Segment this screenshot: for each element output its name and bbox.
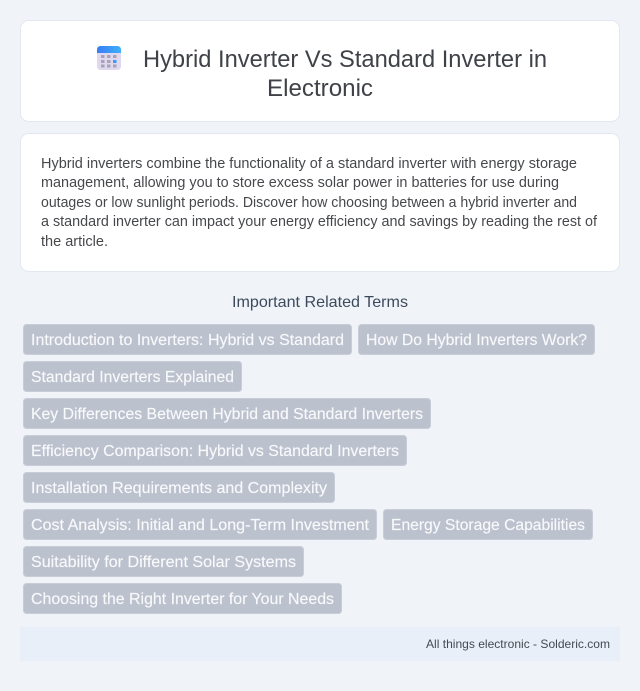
intro paragraph: Hybrid inverters combine the functionality of a standard inverter with energy storage (41, 156, 577, 172)
tag: introduction: Introduction to Inverters: Hybrid vs Standard (31, 332, 344, 349)
tag: choosing: Choosing the Right Inverter for Your Needs (31, 591, 334, 608)
tag: choosing (24, 584, 342, 614)
panel: introduction text (20, 134, 620, 272)
title: Hybrid Inverter Vs Standard Inverter in (143, 46, 547, 73)
footer (20, 627, 620, 661)
tag: how hybrid inverters work: How Do Hybrid Inverters Work? (366, 332, 587, 349)
tag: installation: Installation Requirements and Complexity (31, 480, 327, 497)
footer: All things electronic - Solderic.com (426, 637, 610, 651)
tag: key differences: Key Differences Between Hybrid and Standard Inverters (31, 406, 423, 423)
heading: important related terms: Important Related Terms (232, 294, 408, 311)
tag: how hybrid inverters work (358, 324, 594, 354)
icon: calendar (97, 46, 121, 70)
tag: suitability: Suitability for Different Solar Systems (31, 554, 296, 571)
title (143, 46, 547, 102)
tag: standard inverters (24, 362, 242, 392)
intro paragraph: outages or low sunlight periods. Discover how choosing between a hybrid inverter and (41, 195, 577, 211)
tags: related terms (24, 324, 594, 614)
tag: introduction (24, 324, 352, 354)
tag: efficiency: Efficiency Comparison: Hybrid vs Standard Inverters (31, 443, 399, 460)
intro paragraph: a standard inverter can impact your energy efficiency and savings by reading the rest of (41, 214, 598, 230)
tag: key differences (24, 398, 430, 428)
panel: title card (20, 20, 620, 122)
tag: suitability (24, 546, 304, 576)
tag: cost analysis: Cost Analysis: Initial and Long-Term Investment (31, 517, 370, 534)
intro paragraph: the article. (41, 234, 108, 250)
intro paragraph (41, 156, 598, 250)
tag: efficiency (24, 436, 406, 466)
tag: installation (24, 472, 334, 502)
tag: standard inverters: Standard Inverters Explained (31, 369, 234, 386)
tag: energy storage: Energy Storage Capabilities (391, 517, 585, 534)
tag: cost analysis (24, 510, 376, 540)
title: Electronic (267, 75, 373, 102)
tag: energy storage (384, 510, 592, 540)
intro paragraph: management, allowing you to store excess solar power in batteries for use during (41, 175, 559, 191)
